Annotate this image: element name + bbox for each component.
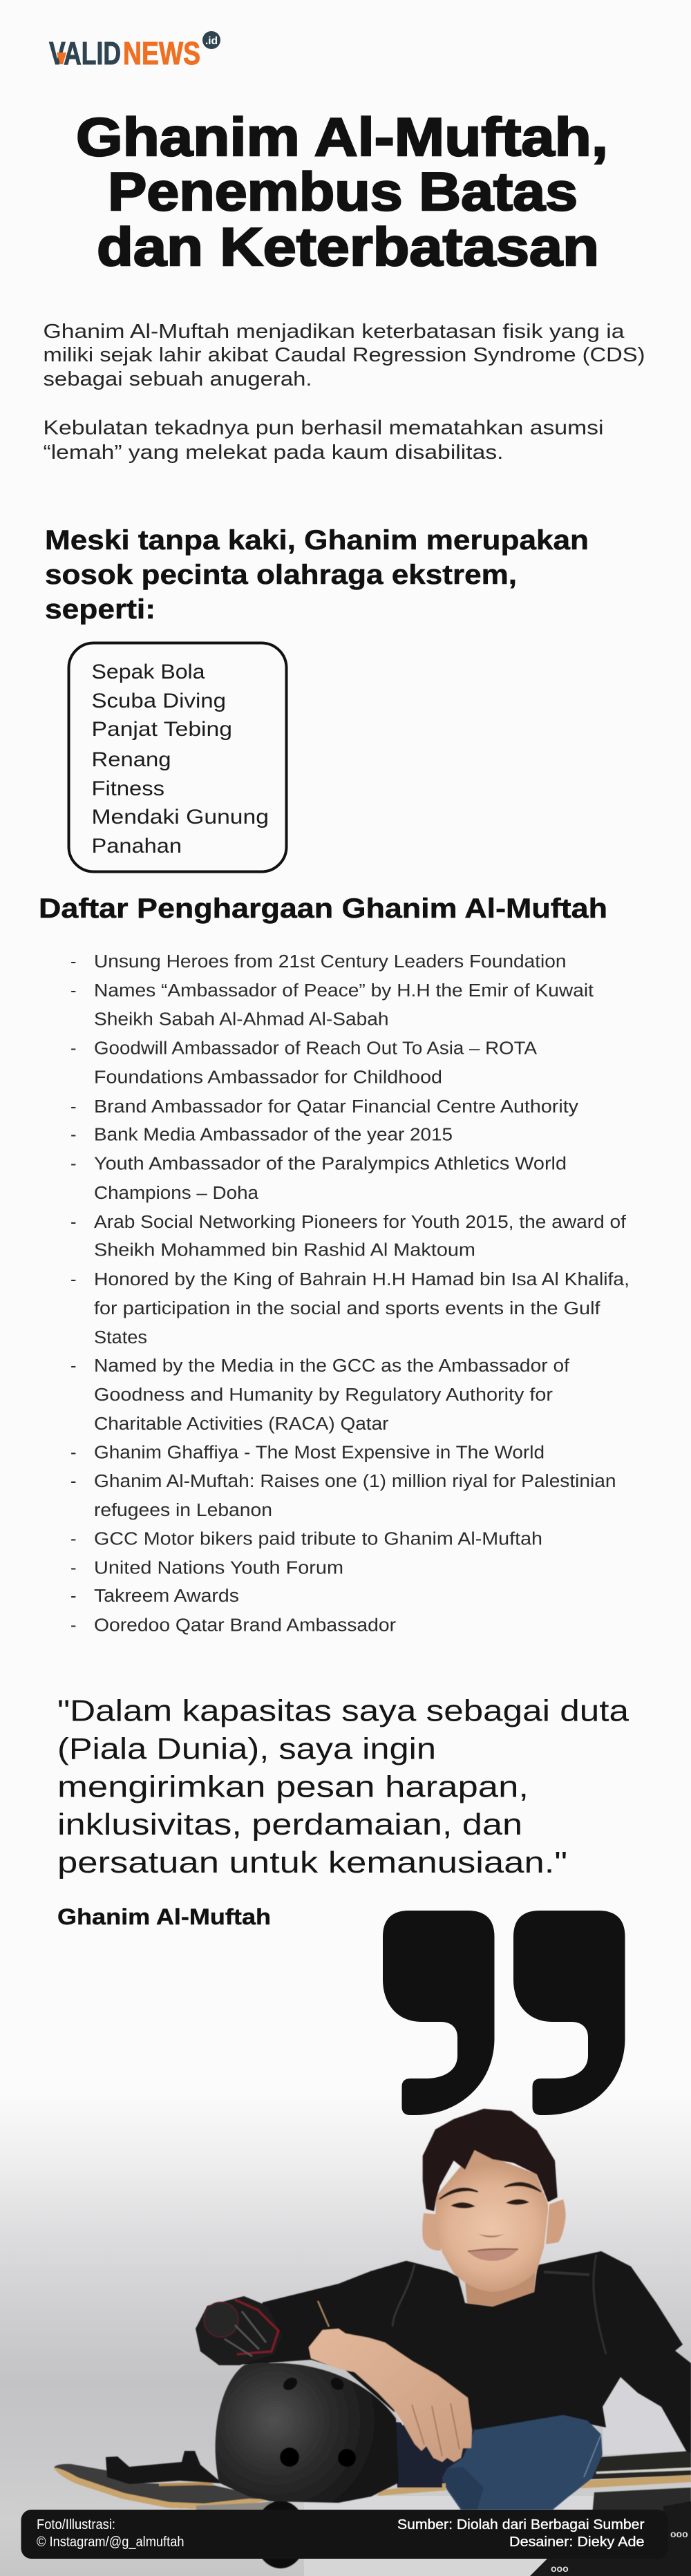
awards list	[70, 952, 630, 1635]
title: Penembus Batas	[108, 161, 578, 222]
source and designer	[397, 2517, 645, 2550]
quote text	[57, 1694, 630, 1879]
right glove: ooo	[670, 2528, 688, 2539]
awards list: -	[70, 1472, 76, 1491]
awards list: -	[70, 1213, 76, 1232]
logo: Validnews.id: .id	[205, 35, 218, 47]
head	[422, 2109, 566, 2307]
awards list: Goodwill Ambassador of Reach Out To Asia – ROTA	[94, 1039, 537, 1059]
illustration: Ghanim with helmet on skateboard	[54, 2109, 691, 2568]
awards list: -	[70, 1530, 76, 1549]
awards list: Named by the Media in the GCC as the Ambassador of	[94, 1356, 570, 1376]
panel: sports list: Mendaki Gunung	[91, 806, 269, 828]
awards list: Sheikh Sabah Al-Ahmad Al-Sabah	[94, 1010, 388, 1030]
elbow pad	[196, 2296, 282, 2365]
quote text: inklusivitas, perdamaian, dan	[57, 1808, 522, 1841]
photo credit: © Instagram/@g_almuftah	[37, 2535, 184, 2550]
source and designer: Desainer: Dieky Ade	[509, 2535, 644, 2550]
strap	[106, 2451, 223, 2484]
quote text: persatuan untuk kemanusiaan."	[57, 1846, 567, 1879]
right glove	[530, 2501, 691, 2576]
cuff	[394, 2407, 408, 2425]
intro text: Ghanim Al-Muftah menjadikan keterbatasan fisik yang ia	[43, 321, 625, 343]
source and designer: Sumber: Diolah dari Berbagai Sumber	[397, 2517, 645, 2532]
logo: Validnews.id	[49, 31, 220, 71]
arm and hand	[309, 2329, 472, 2462]
wheel and truck	[196, 2488, 691, 2568]
quote text: (Piala Dunia), saya ingin	[57, 1732, 436, 1766]
logo: Validnews.id: VALID	[49, 35, 121, 71]
awards list: Takreem Awards	[94, 1587, 239, 1606]
quote text: mengirimkan pesan harapan,	[57, 1770, 529, 1803]
intro text: Kebulatan tekadnya pun berhasil mematahkan asumsi	[43, 417, 604, 439]
awards list: -	[70, 1616, 76, 1635]
awards list: United Nations Youth Forum	[94, 1559, 343, 1578]
awards list: Honored by the King of Bahrain H.H Hamad bin Isa Al Khalifa,	[94, 1270, 630, 1289]
awards list: -	[70, 1097, 76, 1117]
awards list: for participation in the social and sports events in the Gulf	[94, 1299, 601, 1318]
quote attribution: Ghanim Al-Muftah	[57, 1904, 271, 1929]
title: Ghanim Al-Muftah,	[76, 106, 608, 167]
awards list: Youth Ambassador of the Paralympics Athletics World	[94, 1154, 567, 1173]
quote text: "Dalam kapasitas saya sebagai duta	[57, 1694, 630, 1727]
awards list: -	[70, 1125, 76, 1144]
title: dan Keterbatasan	[97, 216, 599, 277]
awards list: States	[94, 1328, 147, 1347]
panel: sports list: Panjat Tebing	[91, 718, 232, 741]
awards list: -	[70, 1587, 76, 1606]
panel: sports list: Sepak Bola	[91, 661, 205, 683]
shirt	[244, 2251, 691, 2453]
awards list: Unsung Heroes from 21st Century Leaders Foundation	[94, 952, 567, 972]
heading: extreme sports: seperti:	[45, 594, 155, 625]
photo credit	[37, 2517, 184, 2550]
logo: Validnews.id: NEWS	[123, 35, 200, 71]
panel: sports list	[69, 643, 286, 872]
awards list: Sheikh Mohammed bin Rashid Al Maktoum	[94, 1241, 475, 1260]
heading: awards: Daftar Penghargaan Ghanim Al-Muftah	[39, 893, 607, 924]
heading: extreme sports: Meski tanpa kaki, Ghanim merupakan	[45, 525, 589, 556]
intro text	[43, 321, 645, 464]
awards list: Goodness and Humanity by Regulatory Authority for	[94, 1385, 553, 1405]
footer bar	[21, 2510, 668, 2559]
awards list: refugees in Lebanon	[94, 1501, 272, 1520]
awards list: -	[70, 952, 76, 972]
panel: sports list: Fitness	[91, 777, 164, 800]
intro text: sebagai sebuah anugerah.	[43, 368, 312, 390]
awards list: Brand Ambassador for Qatar Financial Centre Authority	[94, 1097, 578, 1117]
awards list: -	[70, 1559, 76, 1578]
heading: extreme sports: sosok pecinta olahraga ekstrem,	[45, 560, 517, 590]
awards list: -	[70, 1039, 76, 1059]
helmet	[216, 2362, 399, 2503]
awards list: Charitable Activities (RACA) Qatar	[94, 1414, 389, 1434]
photo credit: Foto/Illustrasi:	[37, 2517, 115, 2532]
awards list: -	[70, 1270, 76, 1289]
awards list: Ghanim Al-Muftah: Raises one (1) million riyal for Palestinian	[94, 1472, 616, 1491]
board wood under jeans	[442, 2483, 446, 2491]
awards list: GCC Motor bikers paid tribute to Ghanim Al-Muftah	[94, 1530, 542, 1549]
awards list: Ooredoo Qatar Brand Ambassador	[94, 1616, 397, 1635]
panel: sports list: Renang	[91, 748, 171, 771]
intro text: miliki sejak lahir akibat Caudal Regression Syndrome (CDS)	[43, 344, 645, 366]
jeans	[394, 2415, 603, 2510]
skateboard	[54, 2451, 691, 2509]
awards list: Ghanim Ghaffiya - The Most Expensive in The World	[94, 1443, 545, 1462]
awards list: Champions – Doha	[94, 1184, 259, 1203]
awards list: Arab Social Networking Pioneers for Youth 2015, the award of	[94, 1213, 627, 1232]
awards list: Bank Media Ambassador of the year 2015	[94, 1125, 453, 1144]
awards list: -	[70, 1356, 76, 1376]
icon: closing quotation marks	[383, 1911, 625, 2115]
intro text: “lemah” yang melekat pada kaum disabilitas.	[43, 442, 503, 464]
right glove: ooo	[551, 2563, 569, 2574]
title	[76, 106, 608, 277]
panel: sports list: Scuba Diving	[91, 690, 226, 712]
awards list: -	[70, 981, 76, 1001]
heading: extreme sports	[45, 525, 589, 625]
panel: sports list: Panahan	[91, 835, 182, 858]
awards list: Foundations Ambassador for Childhood	[94, 1068, 442, 1088]
awards list: -	[70, 1154, 76, 1173]
awards list: Names “Ambassador of Peace” by H.H the Emir of Kuwait	[94, 981, 594, 1001]
awards list: -	[70, 1443, 76, 1462]
